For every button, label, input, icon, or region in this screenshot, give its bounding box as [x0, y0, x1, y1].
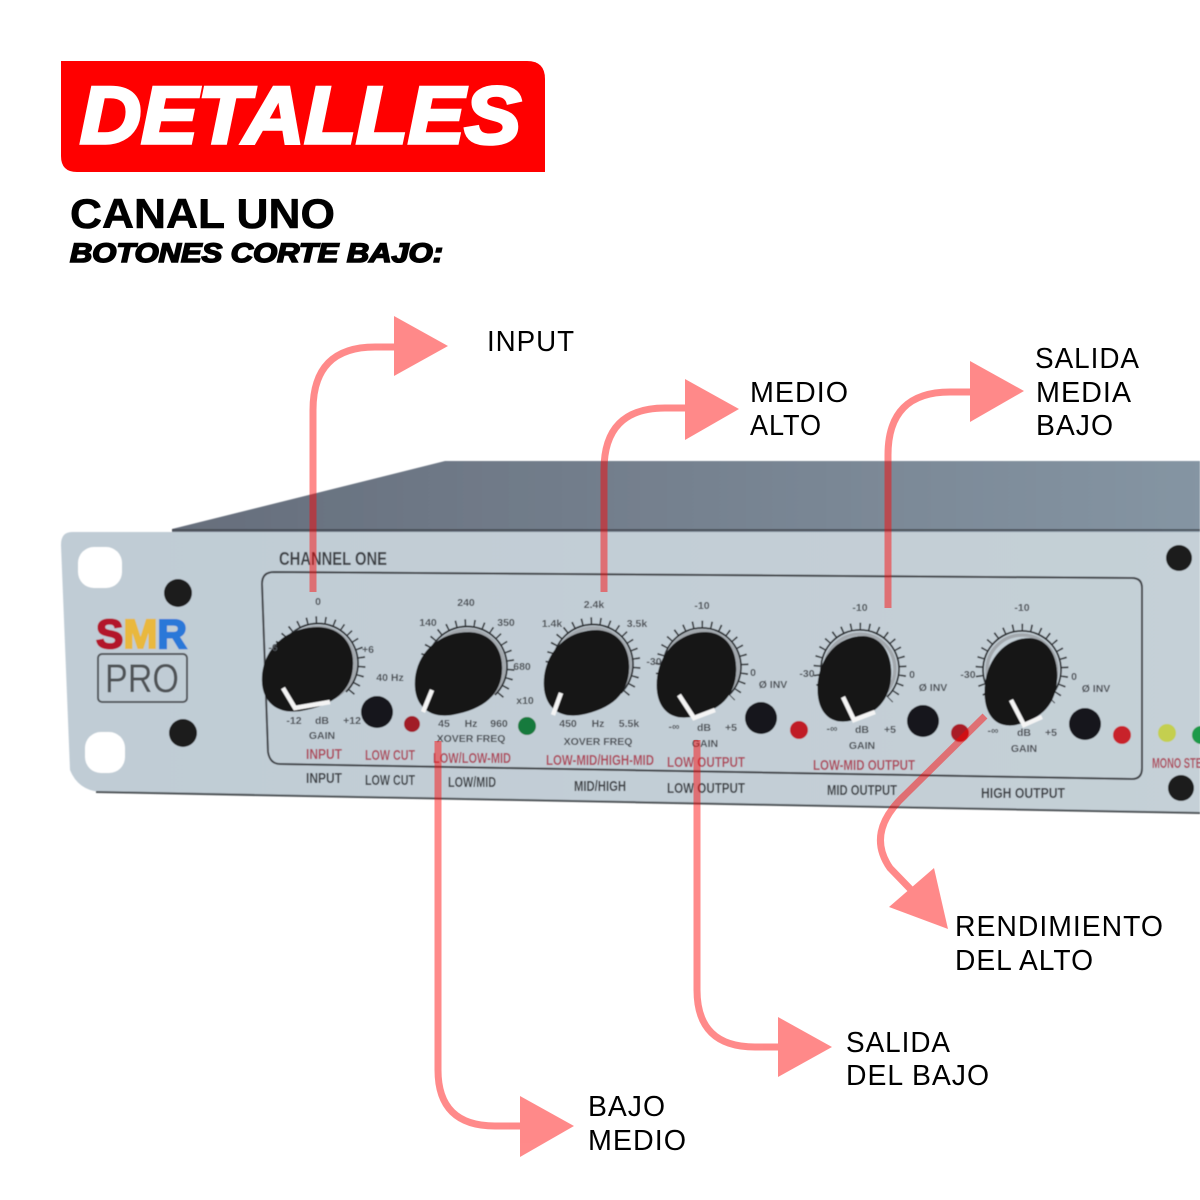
heading: canal uno: CANAL UNO	[70, 190, 335, 237]
knob: high output: +5	[1045, 727, 1057, 739]
knob: low output: -10	[694, 600, 710, 612]
knob: input: +6	[362, 644, 374, 656]
knob: low output: dB	[697, 722, 711, 734]
dark section labels: INPUT	[306, 770, 342, 787]
label: salida del bajo: DEL BAJO	[846, 1060, 990, 1092]
knob: low/mid: 680	[513, 661, 531, 673]
red section labels: LOW CUT	[365, 747, 415, 764]
knob: low/mid: Hz	[465, 718, 477, 730]
status LEDs	[404, 716, 1200, 744]
red section labels: LOW OUTPUT	[667, 754, 745, 771]
button captions: Ø INV	[1082, 683, 1110, 695]
label: medio alto: MEDIO	[750, 377, 849, 409]
knob: mid/high: XOVER FREQ	[564, 736, 632, 748]
knob: mid output: +5	[884, 724, 896, 736]
knob: low/mid: 45	[438, 718, 450, 730]
device top cover	[172, 461, 1200, 532]
knob: mid/high: Hz	[592, 718, 604, 730]
button captions: 40 Hz	[376, 672, 404, 684]
logo: SMR PRO: PRO	[105, 657, 179, 701]
knob: low/mid: 350	[497, 617, 515, 629]
knob: input: dB	[315, 715, 329, 727]
logo: SMR PRO: SMR	[96, 611, 187, 657]
knob: low/mid	[415, 597, 534, 745]
red section labels	[306, 746, 1200, 774]
dark section labels: MID/HIGH	[574, 778, 626, 795]
dark section labels: LOW OUTPUT	[667, 780, 745, 797]
knob: mid/high: 2.4k	[584, 599, 604, 611]
title banner: DETALLES	[80, 71, 521, 161]
knob: input: GAIN	[309, 730, 335, 742]
arrow: input	[313, 316, 448, 592]
knob: high output: GAIN	[1011, 743, 1037, 755]
knob: low/mid: x10	[516, 695, 534, 707]
label: salida del bajo	[846, 1027, 990, 1092]
knob: input: 0	[315, 596, 321, 608]
knob: low/mid: 140	[419, 617, 437, 629]
label: salida media bajo: MEDIA	[1036, 377, 1132, 409]
label: salida media bajo: BAJO	[1036, 410, 1114, 442]
front panel	[61, 530, 1200, 813]
dark section labels: LOW CUT	[365, 772, 415, 789]
subheading: botones corte bajo: BOTONES CORTE BAJO:	[70, 238, 443, 268]
knob: low output: -30	[646, 656, 662, 668]
button captions	[376, 672, 1110, 695]
knob: high output: -∞	[988, 725, 999, 737]
red section labels: INPUT	[306, 746, 342, 763]
arrow: medio alto	[604, 379, 739, 592]
knob: mid/high: 1.4k	[542, 618, 562, 630]
knob: high output: -30	[960, 669, 976, 681]
red section labels: LOW-MID OUTPUT	[813, 757, 915, 774]
knob: low output: 0	[750, 667, 756, 679]
red section labels: LOW/LOW-MID	[433, 750, 511, 767]
knob: mid output: 0	[909, 669, 915, 681]
arrow: bajo medio	[438, 741, 574, 1157]
knob: high output: dB	[1017, 727, 1031, 739]
knob: low output	[646, 600, 756, 750]
arrow: salida media bajo	[888, 361, 1024, 608]
knob: high output: -10	[1014, 602, 1030, 614]
dark section labels	[306, 770, 1065, 802]
label: bajo medio: BAJO	[588, 1091, 666, 1123]
knob: low output: +5	[725, 722, 737, 734]
label: salida media bajo: SALIDA	[1035, 343, 1140, 375]
knob: mid output: -10	[852, 602, 868, 614]
knob: mid output: GAIN	[849, 740, 875, 752]
button captions: Ø INV	[919, 682, 947, 694]
label: rendimiento del alto	[955, 911, 1164, 977]
label: medio alto	[750, 377, 849, 442]
label: rendimiento del alto: DEL ALTO	[955, 945, 1094, 977]
knob: low/mid: 240	[457, 597, 475, 609]
knob: input: +12	[343, 715, 361, 727]
label: salida del bajo: SALIDA	[846, 1027, 951, 1059]
dark section labels: HIGH OUTPUT	[981, 785, 1065, 802]
push buttons	[361, 696, 1101, 740]
knob: mid output: -30	[799, 668, 815, 680]
device: rack equalizer	[61, 461, 1200, 813]
knob: input: -6	[268, 642, 278, 654]
knob: mid/high	[542, 599, 647, 748]
knob: mid output: dB	[855, 724, 869, 736]
knob: low/mid: XOVER FREQ	[437, 733, 505, 745]
arrow: salida del bajo	[697, 740, 832, 1077]
button captions: Ø INV	[759, 679, 787, 691]
knob: mid output: -∞	[827, 723, 838, 735]
label: salida media bajo	[1035, 343, 1140, 442]
label: input: INPUT	[487, 326, 575, 358]
knob: mid/high: 450	[559, 718, 577, 730]
knob: mid/high: 5.5k	[619, 718, 639, 730]
knob: input	[262, 596, 374, 742]
arrow: rendimiento del alto	[880, 716, 985, 929]
dark section labels: MID OUTPUT	[827, 782, 897, 799]
label: rendimiento del alto: RENDIMIENTO	[955, 911, 1164, 943]
knob: low output: GAIN	[692, 738, 718, 750]
knob: high output	[960, 602, 1077, 755]
dark section labels: LOW/MID	[448, 774, 496, 791]
channel one title: CHANNEL ONE	[279, 549, 387, 569]
rack screws	[164, 545, 1194, 801]
knob: mid output	[799, 602, 915, 752]
label: bajo medio: MEDIO	[588, 1125, 687, 1157]
red section labels: LOW-MID/HIGH-MID	[546, 752, 654, 769]
knob: low output: -∞	[669, 721, 680, 733]
knob: mid/high: 3.5k	[627, 618, 647, 630]
channel outline	[262, 572, 1142, 779]
knob: high output: 0	[1071, 671, 1077, 683]
knob: low/mid: 960	[490, 718, 508, 730]
label: medio alto: ALTO	[750, 410, 822, 442]
logo: SMR PRO	[96, 611, 187, 702]
label: bajo medio	[588, 1091, 687, 1157]
knob: input: -12	[286, 715, 302, 727]
